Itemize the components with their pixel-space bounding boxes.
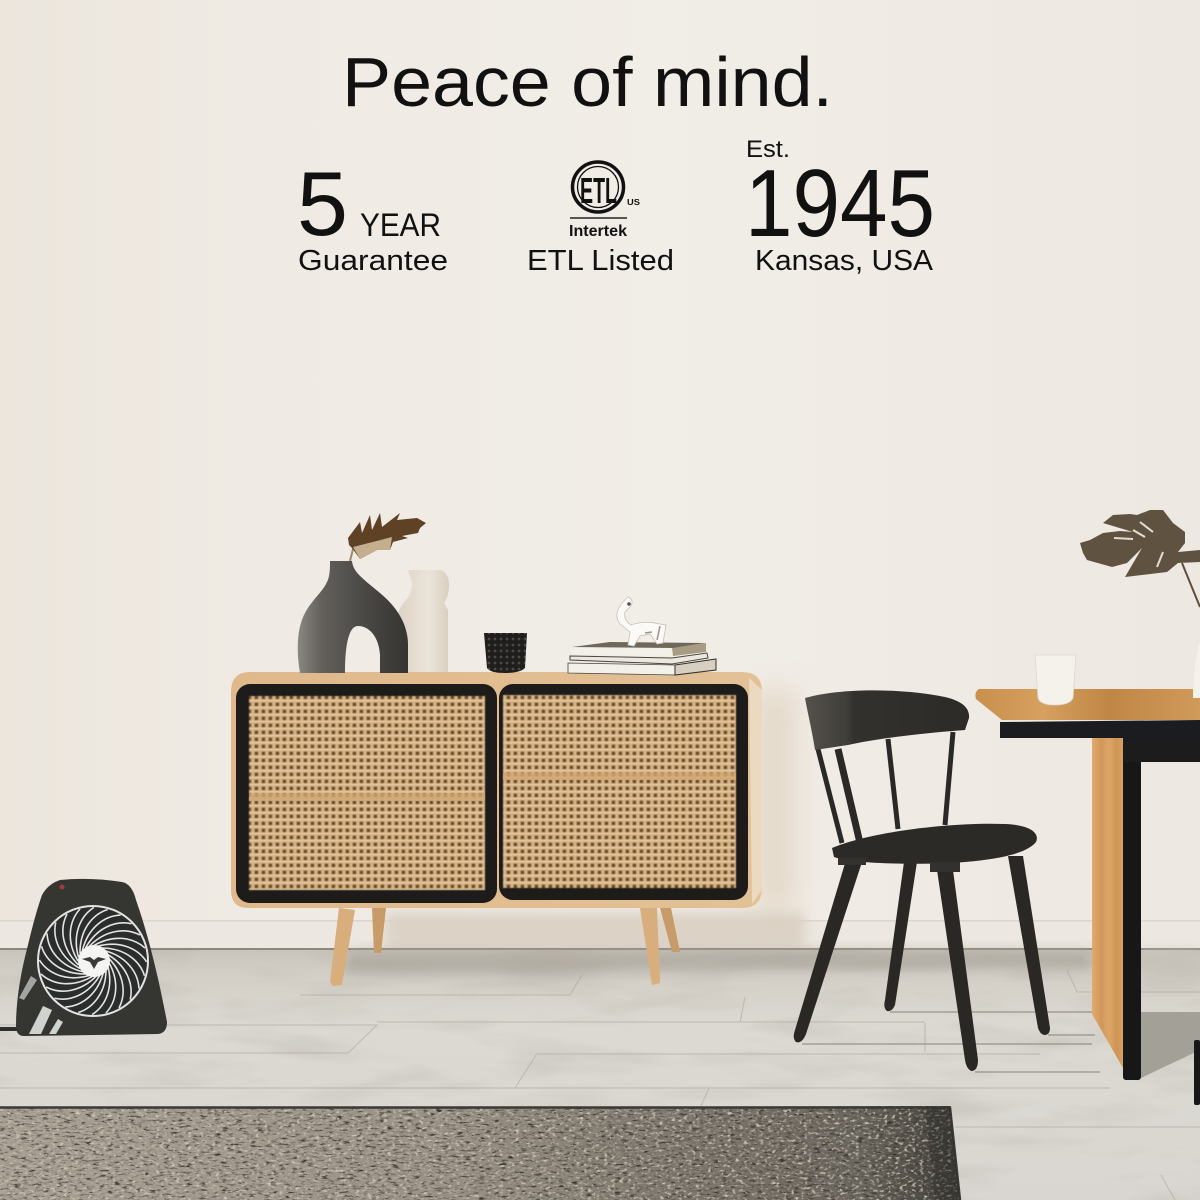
chair seat [832, 824, 1037, 864]
baseboard [0, 912, 1200, 950]
floor with planks [0, 950, 1200, 1200]
title: Peace of mind. [342, 43, 833, 121]
decor: dried feather leaf [348, 513, 426, 561]
badge: 5 year guarantee: 5 [297, 154, 348, 255]
heater stripes [19, 976, 63, 1034]
power light [60, 884, 64, 890]
white vase on table edge [1193, 640, 1200, 698]
badge: established 1945 [745, 136, 935, 277]
fan grille [37, 905, 149, 1017]
rug [0, 1106, 960, 1200]
badge: ETL listed: Intertek [569, 223, 627, 240]
decor: white deer figurine [617, 597, 666, 646]
heater body [16, 879, 167, 1036]
badge: established 1945: 1945 [745, 150, 935, 257]
table leg black [1123, 737, 1200, 1105]
wall background [0, 0, 1200, 950]
badge: 5 year guarantee: YEAR [360, 207, 441, 243]
decor: stacked books [568, 642, 716, 675]
chair spindles [818, 732, 953, 843]
decor: black cup [484, 633, 527, 673]
sideboard body [231, 672, 762, 908]
icon: ETL mark [570, 162, 641, 219]
icon: ETL mark: US [627, 198, 641, 207]
left door [236, 684, 497, 903]
badge: established 1945: Est. [746, 136, 790, 163]
badge: ETL listed [527, 162, 674, 277]
decor: cream jug [397, 570, 449, 672]
table leg wood [1092, 737, 1123, 1068]
power cord [0, 1027, 18, 1031]
dining table [975, 689, 1200, 1105]
chair legs [794, 856, 1050, 1071]
chair seat collars [838, 858, 960, 872]
sideboard legs [330, 908, 680, 986]
decor: vase with arch [298, 561, 408, 673]
chair backrest [805, 690, 969, 750]
chair [794, 690, 1050, 1071]
sideboard [231, 672, 762, 986]
product: space heater [0, 879, 167, 1036]
table apron [1000, 720, 1200, 738]
table top [975, 689, 1200, 720]
badge: 5 year guarantee [297, 154, 448, 277]
fan hub [78, 945, 110, 977]
sideboard shadow [755, 690, 795, 910]
icon: ETL mark: ETL [580, 170, 617, 211]
mug [1035, 655, 1076, 705]
floor shadows of table and chair [802, 1012, 1200, 1078]
badge: 5 year guarantee: Guarantee [298, 245, 448, 277]
badge: established 1945: Kansas, USA [755, 245, 934, 277]
right door [499, 684, 748, 900]
monstera leaf [1080, 510, 1200, 607]
badge: ETL listed: ETL Listed [527, 245, 674, 277]
